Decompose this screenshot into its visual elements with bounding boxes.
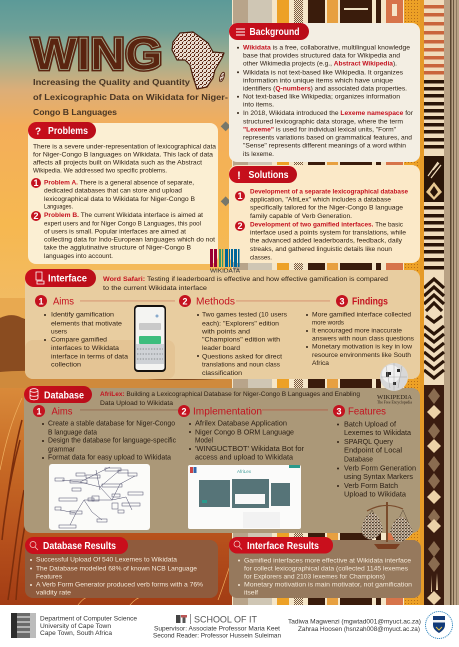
icon: balance scale — [361, 502, 413, 549]
Wikipedia wordmark: WIKIPEDIA — [377, 394, 412, 401]
database features: Upload to Wikidata — [344, 492, 406, 499]
database features: Verb Form Batch — [344, 483, 398, 490]
AfriLex screenshot: AfriLex — [237, 469, 252, 474]
interface methods: Methods — [196, 296, 235, 308]
problem B: Problem B. The current Wikidata interface is aimed at — [44, 212, 203, 219]
solution 2: streaks, and gathered linguistic details like noun — [250, 246, 392, 253]
database implementation: 'WINGUCTBOT' Wikidata Bot for — [195, 446, 305, 453]
interface methods: translations and noun class — [202, 362, 281, 369]
background bullets: information into unique items which have unique — [243, 77, 393, 84]
icon: department logo — [11, 613, 36, 638]
heading: database: Database — [44, 390, 84, 402]
solution 2: Development of two gamified interfaces. The basic — [250, 221, 404, 228]
database features: Features — [348, 406, 386, 418]
heading: problems: ? — [35, 126, 41, 138]
database results bullets: Successful Upload Of 540 Lexemes to Wikidata — [36, 557, 177, 564]
background bullets: its lexeme. — [243, 151, 274, 158]
interface findings: Findings — [352, 296, 388, 308]
problem B: of users is small. Popular interfaces are aimed at — [44, 228, 186, 235]
icon: Wikipedia globe — [380, 363, 408, 391]
interface findings: resource environments like South — [312, 352, 411, 359]
interface aims: elements that motivate — [51, 320, 122, 327]
database features: 3 — [336, 406, 342, 416]
panel: database results — [25, 537, 218, 598]
subtitle: Increasing the Quality and Quantity — [33, 78, 190, 87]
solution 1: Development of a separate lexicographical database — [250, 188, 408, 195]
database implementation — [178, 405, 328, 462]
heading: database results — [25, 537, 128, 554]
background bullets: structured lexicographic data storage, where the term — [243, 118, 403, 125]
background bullets: Wikidata is not text-based like Wikipedia. It organizes — [243, 69, 404, 76]
interface results bullets: itself — [244, 590, 258, 597]
database implementation: Afrilex Database Application — [195, 421, 287, 428]
database features: Endpoint of Local — [344, 448, 402, 455]
interface description: to the current Wikidata interface — [103, 285, 207, 292]
problem B: 2 — [33, 211, 39, 221]
School of IT logo and supervisors — [153, 614, 282, 640]
database aims: B language data — [48, 429, 97, 436]
intro text: for Niger-Congo B languages on Wikidata. This lack of data — [33, 152, 213, 159]
subtitle: Congo B Languages — [33, 108, 117, 117]
footer — [0, 605, 459, 647]
icon: Wikidata logo — [210, 249, 241, 274]
interface description — [103, 276, 388, 292]
database aims: Design the database for language-specific — [48, 438, 177, 445]
interface aims: Compare gamified — [51, 337, 107, 344]
interface methods — [179, 295, 330, 377]
database features — [333, 405, 416, 499]
department text — [40, 616, 138, 637]
title: WING: WING — [32, 28, 162, 80]
problem A: 1 — [33, 178, 39, 188]
solution 2: interface used a points system for translations, while — [250, 230, 406, 237]
database implementation: Niger Congo B ORM Language — [195, 429, 294, 436]
tile columns — [233, 0, 424, 605]
interface methods: leader board — [202, 345, 240, 352]
database results bullets: The Database modelled 68% of known NCB Language — [36, 565, 197, 572]
database implementation: Model — [195, 438, 213, 444]
solution 2: classes. — [250, 254, 272, 261]
interface findings: Africa — [312, 360, 329, 367]
intro text — [33, 144, 216, 175]
database features: Lexemes to Wikidata — [344, 430, 411, 437]
interface methods: with points and — [201, 328, 250, 335]
icon: Wikidata logo: WIKIDATA — [210, 268, 241, 274]
solution 2: the advanced added leaderboards, feedback, daily — [250, 238, 403, 245]
School of IT logo and supervisors: Supervisor: Associate Professor Maria Keet — [154, 626, 280, 633]
background bullets: represents variations based on grammatical features, and — [243, 135, 412, 142]
panel: interface results — [229, 537, 421, 598]
panel: solutions — [229, 165, 420, 263]
solution 1: family capable of Verb Generation. — [250, 213, 352, 220]
panel: interface — [25, 269, 420, 379]
database aims: 1 — [36, 406, 42, 416]
database aims: Format data for easy upload to Wikidata — [48, 455, 171, 462]
database results bullets: A Verb Form Generator produced verb forms with a 76% — [36, 582, 203, 589]
database aims — [33, 405, 178, 462]
database aims: Aims — [52, 406, 72, 418]
solution 1 — [235, 188, 408, 220]
solution 2 — [235, 221, 406, 261]
interface aims: users — [51, 328, 68, 335]
database description: Data Upload to Wikidata — [100, 400, 173, 407]
database features: SPARQL Query — [344, 439, 394, 446]
panel: database — [24, 386, 420, 533]
interface findings — [306, 295, 415, 367]
database diagram — [49, 464, 150, 530]
background bullets: other Wikimedia projects (e.g., Abstract Wikipedia). — [243, 61, 397, 68]
database implementation: 2 — [181, 406, 187, 416]
subtitle: of Lexicographic Data on Wikidata for Niger- — [33, 93, 228, 102]
problem A: Languages. — [44, 204, 73, 211]
problem A: Problem A. There is a general absence of separate, — [44, 179, 194, 186]
heading: interface results: Interface Results — [247, 541, 319, 552]
background bullets: identifiers (Q-numbers) and associated data properties. — [243, 85, 407, 92]
interface findings: Monetary motivation is key in low — [312, 344, 412, 351]
database implementation: access and upload to Wikidata — [195, 455, 293, 462]
database results bullets: Features — [36, 573, 62, 580]
interface aims: interface in terms of data — [51, 353, 128, 360]
heading: database results: Database Results — [43, 541, 116, 552]
intro text: Wikipedia. We addressed two specific problems. — [33, 168, 167, 175]
heading: solutions: Solutions — [248, 170, 289, 181]
heading: database — [24, 386, 92, 403]
intro text: affects all projects built on Wikidata such as the Abstract — [33, 160, 202, 167]
interface aims: 1 — [38, 296, 44, 306]
department text: University of Cape Town — [40, 623, 112, 630]
interface aims: Identify gamification — [51, 312, 114, 319]
authors: Tadiwa Magwenzi (mgwtad001@myuct.ac.za) — [288, 619, 421, 626]
interface results bullets: for collect lexicographical data (collected 1145 lexemes — [244, 566, 408, 573]
icon: Africa map — [172, 32, 226, 89]
heading: background — [229, 23, 309, 40]
subtitle — [33, 78, 228, 117]
interface findings: answers with noun class questions — [312, 336, 415, 343]
interface aims: Aims — [53, 296, 74, 308]
heading: interface results — [229, 537, 333, 554]
interface results bullets: Monetary motivation is main motivator, not gamification — [244, 582, 412, 589]
School of IT logo and supervisors: Second Reader: Professor Hussein Suleiman — [153, 633, 282, 640]
database features: Database — [344, 457, 373, 464]
database results bullets — [30, 557, 203, 597]
solution 1: specifically tailored for the Niger-Congo B language — [250, 205, 403, 212]
interface results bullets: for Explorers and 2103 lexemes for Champions) — [244, 573, 385, 580]
interface findings: More gamified interface collected — [312, 312, 411, 319]
solution 1: application, "AfriLex" which includes a database — [250, 197, 391, 204]
interface methods: Two games tested (10 users — [202, 312, 288, 319]
background bullets: "Sense" represents different meanings of a word within — [243, 143, 406, 150]
problem A: lexicographical data to Wikidata for Niger-Congo B — [44, 196, 195, 203]
problem B: expert users and for Niger Congo B Languages, this pool — [44, 220, 202, 227]
interface findings: more words — [312, 319, 345, 326]
background bullets: base that provides structured data for Wikipedia and — [243, 53, 400, 60]
problem B: take the agglutinative structure of Niger-Congo B — [44, 245, 191, 252]
database aims: Create a stable database for Niger-Congo — [48, 421, 175, 428]
problem B: collecting data for Indo-European languages which do not — [44, 236, 215, 243]
interface results bullets — [238, 557, 412, 597]
interface findings: 3 — [339, 296, 345, 306]
interface findings: It encouraged more inaccurate — [312, 328, 402, 335]
School of IT logo and supervisors: SCHOOL OF IT — [194, 614, 257, 626]
panel: problems — [28, 122, 218, 264]
heading: background: Background — [250, 27, 300, 38]
problem A: dedicated databases that can store and upload — [44, 188, 182, 195]
background bullets: "Lexeme" is used for individual lexical units, "Form" — [243, 126, 397, 133]
right stripes — [424, 0, 459, 605]
interface methods: each): "Explorers" edition — [202, 320, 279, 327]
solution 1: 1 — [237, 191, 243, 201]
database aims: grammar — [48, 446, 76, 453]
database results bullets: validity rate — [36, 590, 71, 597]
AfriLex screenshot — [188, 465, 301, 529]
background bullets: Wikidata is a free, collaborative, multilingual knowledge — [243, 45, 410, 52]
background bullets — [237, 45, 414, 158]
database implementation: Implementation — [193, 406, 262, 418]
background bullets: into items. — [243, 102, 274, 109]
heading: solutions: ! — [237, 170, 241, 182]
interface description: Word Safari: Testing if leaderboard is effective and how effective gamification is compared — [103, 276, 388, 283]
panel: background — [229, 23, 420, 162]
database features: Batch Upload of — [344, 421, 396, 428]
database features: using Syntax Markers — [344, 474, 414, 481]
heading: problems — [28, 122, 96, 139]
interface aims: interfaces to Wikidata — [51, 345, 119, 352]
intro text: There is a severe under-representation of lexicographical data — [33, 144, 216, 150]
heading: interface — [25, 269, 96, 287]
interface results bullets: Gamified interfaces more effective at Wikidata interface — [244, 557, 411, 564]
problem B: languages into account. — [44, 253, 113, 260]
problem A — [31, 178, 195, 211]
interface methods: 2 — [182, 296, 188, 306]
title: WING: WING — [32, 28, 162, 80]
problem B — [31, 211, 215, 260]
authors — [288, 619, 421, 633]
interface methods: "Champions" edition with — [202, 337, 280, 344]
interface aims: collection — [51, 362, 81, 369]
database description — [100, 391, 360, 407]
heading: solutions — [229, 166, 297, 183]
authors: Zahraa Hoosen (hsnzah008@myuct.ac.za) — [298, 626, 420, 633]
background bullets: In 2018, Wikidata introduced the Lexeme namespace for — [243, 110, 414, 117]
department text: Cape Town, South Africa — [40, 630, 113, 637]
database features: Verb Form Generation — [344, 465, 416, 472]
interface methods: classification — [202, 370, 242, 377]
database description: AfriLex: Building a Lexicographical Database for Niger-Congo B Languages and Enabling — [100, 391, 360, 398]
interface aims — [35, 295, 175, 369]
interface methods: Questions asked for direct — [202, 353, 282, 360]
Wikipedia wordmark: The Free Encyclopedia — [377, 400, 412, 404]
department text: Department of Computer Science — [40, 616, 138, 623]
solution 2: 2 — [237, 221, 243, 231]
phone screenshot — [134, 305, 166, 372]
Wikipedia wordmark — [377, 394, 412, 404]
background bullets: Not text-based like Wikipedia; organizes information — [243, 94, 400, 101]
icon: UCT crest — [426, 612, 452, 638]
heading: problems: Problems — [48, 126, 88, 137]
heading: interface: Interface — [48, 274, 87, 284]
